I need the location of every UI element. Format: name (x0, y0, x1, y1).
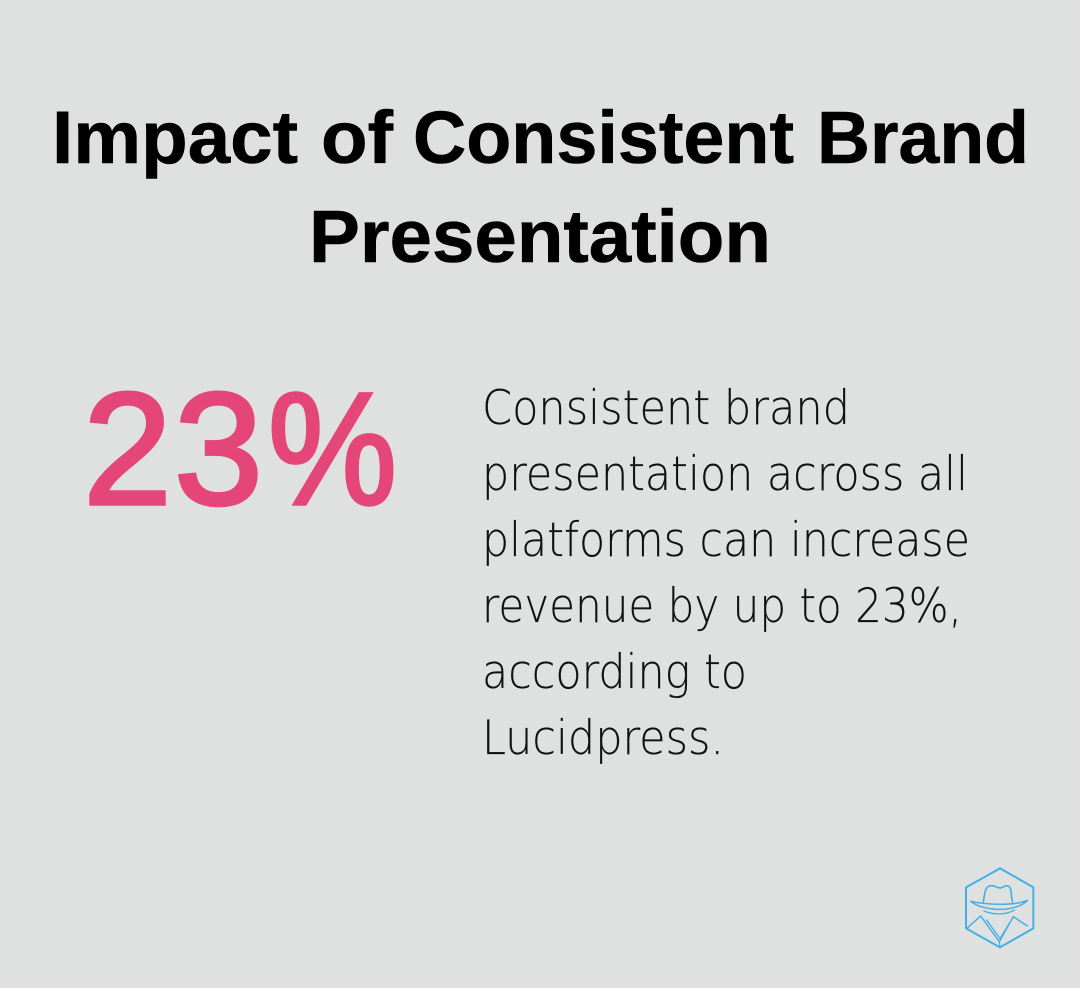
title: of (321, 96, 393, 179)
description text: platforms can increase (482, 513, 970, 568)
title (52, 96, 1029, 278)
title: Impact (52, 96, 298, 179)
icon: detective logo (966, 868, 1033, 947)
title: Presentation (309, 195, 771, 278)
description text: revenue by up to 23%, (482, 579, 962, 634)
description text (482, 381, 970, 766)
description text: Lucidpress. (482, 711, 724, 766)
title: Brand (817, 96, 1029, 179)
title: Consistent (413, 96, 794, 179)
description text: according to (482, 645, 747, 700)
description text: Consistent brand (482, 381, 850, 436)
big statistic: 23%: 23 (83, 359, 263, 538)
description text: presentation across all (482, 447, 968, 502)
big statistic: 23%: % (268, 359, 397, 538)
